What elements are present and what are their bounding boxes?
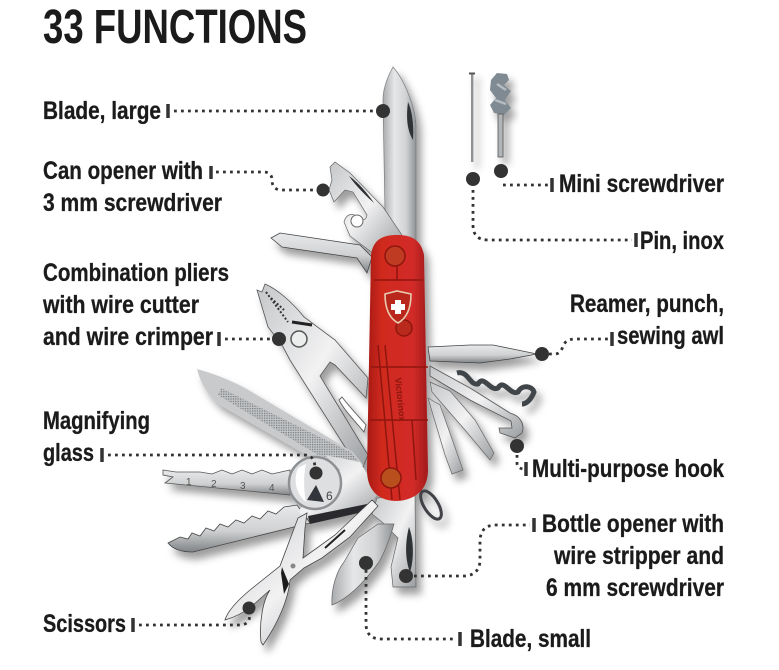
brand name: Victorinox xyxy=(393,377,408,422)
callout: can opener: Can opener with xyxy=(43,157,203,185)
icon: wood saw xyxy=(168,505,310,552)
icon: reamer xyxy=(428,345,537,363)
callout: combination pliers: with wire cutter xyxy=(42,291,199,319)
icon: phillips screwdriver xyxy=(271,233,372,273)
icon: ruler with saw edge: 3 xyxy=(240,481,246,492)
callout: reamer, punch, sewing awl: Reamer, punch, xyxy=(570,290,724,318)
callout: bottle opener xyxy=(399,510,724,602)
callout: multi-purpose hook xyxy=(510,439,724,483)
icon: nail file xyxy=(197,369,364,466)
icon: ruler with saw edge: 2 xyxy=(211,479,217,490)
icon: ruler with saw edge: 1 xyxy=(186,477,192,488)
callout: blade, large: Blade, large xyxy=(43,97,161,125)
pin and mini screwdriver xyxy=(469,72,511,162)
callout: pin, inox: Pin, inox xyxy=(640,227,724,255)
callout: magnifying glass xyxy=(43,407,322,480)
icon: screwdriver blade xyxy=(430,382,494,460)
callout: pin, inox xyxy=(466,172,724,255)
callout: mini screwdriver: Mini screwdriver xyxy=(559,170,724,198)
icon: hook xyxy=(430,366,523,438)
icon: black slit xyxy=(308,503,372,524)
callout: magnifying glass: glass xyxy=(43,439,94,467)
icon: magnifying lens xyxy=(289,457,341,509)
callout: mini screwdriver xyxy=(494,164,724,198)
callout: can opener xyxy=(43,157,330,217)
callout: combination pliers xyxy=(42,259,286,351)
callout: bottle opener: wire stripper and xyxy=(553,542,724,570)
callout: reamer, punch, sewing awl: sewing awl xyxy=(617,322,724,350)
callout: scissors xyxy=(43,602,256,638)
icon: combination pliers xyxy=(257,284,368,467)
callout: bottle opener: Bottle opener with xyxy=(542,510,724,538)
knife tools xyxy=(163,67,537,645)
icon: can opener xyxy=(329,162,402,254)
icon: small blade xyxy=(332,524,394,605)
icon: magnifying glass housing xyxy=(298,455,378,518)
icon: ruler with saw edge: 4 xyxy=(269,483,275,494)
callout: combination pliers: Combination pliers xyxy=(43,259,229,287)
icon: second screwdriver blade xyxy=(428,398,463,474)
callout: reamer, punch, sewing awl xyxy=(535,290,724,361)
callout: can opener: 3 mm screwdriver xyxy=(43,189,222,217)
callout: blade, large xyxy=(43,97,390,125)
icon: large blade xyxy=(383,67,416,240)
callout: blade, small: Blade, small xyxy=(470,625,591,653)
icon: corkscrew xyxy=(457,373,534,404)
title: 33 FUNCTIONS xyxy=(43,1,307,54)
icon: key ring xyxy=(417,488,445,522)
callout: scissors: Scissors xyxy=(43,610,126,638)
callout: combination pliers: and wire crimper xyxy=(43,323,213,351)
icon: swiss cross shield xyxy=(385,291,411,323)
icon: bottle opener xyxy=(372,495,416,587)
icon: scissors xyxy=(225,500,378,645)
callout: blade, small xyxy=(359,556,591,653)
icon: red handle xyxy=(367,235,428,501)
icon: magnifying lens: 6 xyxy=(326,489,333,503)
callout: bottle opener: 6 mm screwdriver xyxy=(546,574,724,602)
callout: magnifying glass: Magnifying xyxy=(43,407,150,435)
callout: multi-purpose hook: Multi-purpose hook xyxy=(532,455,724,483)
icon: ruler with saw edge xyxy=(163,470,290,495)
icon: pin xyxy=(469,72,475,162)
icon: mini screwdriver xyxy=(490,73,511,157)
